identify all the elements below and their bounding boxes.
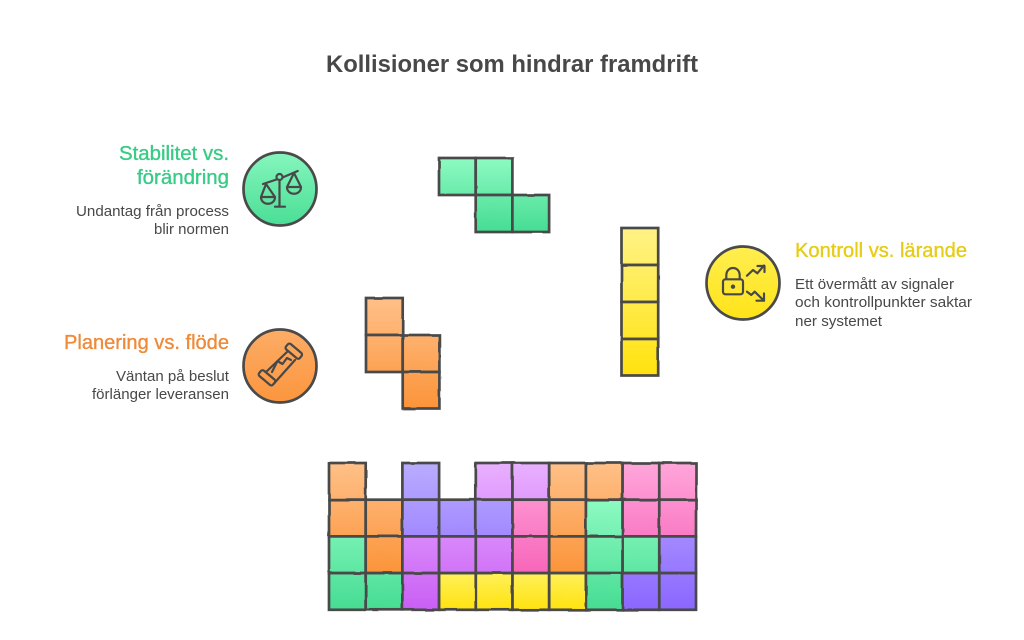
panel: stabilitet vs. förändring bbox=[76, 143, 316, 238]
text: väntan på beslut: förlänger leveransen bbox=[92, 387, 229, 403]
piece: orange tetromino bbox=[366, 298, 439, 408]
text: ett övermått av signaler: och kontrollpunkter saktar bbox=[795, 295, 972, 311]
piece: yellow tetromino bbox=[622, 228, 658, 376]
heading: stabilitet vs. förändring bbox=[119, 143, 229, 189]
text: ett övermått av signaler: ner systemet bbox=[795, 314, 882, 330]
text: ett övermått av signaler: Ett övermått av signaler bbox=[795, 277, 954, 293]
text: ett övermått av signaler bbox=[795, 277, 972, 330]
title: Kollisioner som hindrar framdrift bbox=[326, 51, 698, 78]
piece: green tetromino bbox=[439, 158, 549, 232]
text: undantag från process: blir normen bbox=[154, 222, 229, 238]
panel: kontroll vs. lärande bbox=[706, 240, 972, 330]
heading: kontroll vs. lärande: Kontroll vs. lärande bbox=[795, 240, 967, 262]
panel: planering vs. flöde bbox=[64, 330, 316, 403]
heading: planering vs. flöde: Planering vs. flöde bbox=[64, 332, 229, 354]
text: undantag från process bbox=[76, 204, 229, 238]
stacked block grid bbox=[329, 463, 696, 610]
heading: stabilitet vs. förändring: förändring bbox=[137, 167, 229, 189]
text: undantag från process: Undantag från process bbox=[76, 204, 229, 220]
text: väntan på beslut bbox=[92, 369, 229, 403]
icon: balance scale bbox=[244, 152, 316, 226]
icon: lock and arrows bbox=[706, 246, 780, 320]
icon: hourglass bbox=[244, 330, 316, 402]
text: väntan på beslut: Väntan på beslut bbox=[116, 369, 229, 385]
heading: stabilitet vs. förändring: Stabilitet vs. bbox=[119, 143, 229, 165]
